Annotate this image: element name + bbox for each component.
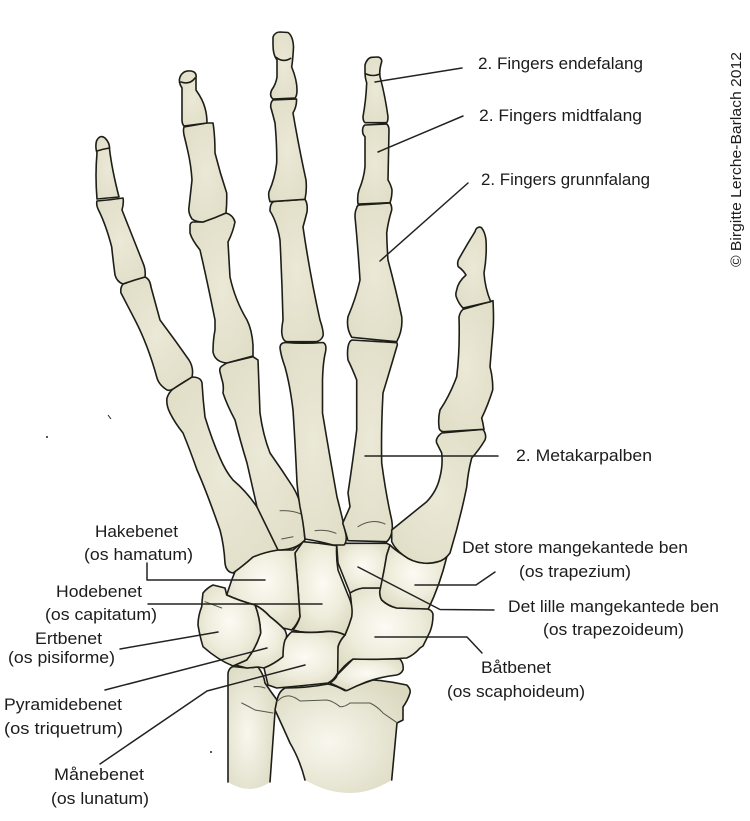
label: triquetrum: (os triquetrum) bbox=[4, 719, 123, 738]
label: capitate: (os capitatum) bbox=[45, 605, 157, 624]
label: scaphoid: (os scaphoideum) bbox=[447, 682, 585, 701]
carpal: lunate bbox=[264, 631, 345, 688]
label: lunate: (os lunatum) bbox=[51, 789, 149, 808]
finger: little finger bbox=[96, 137, 278, 573]
label: pisiform: Ertbenet bbox=[35, 629, 102, 648]
label: trapezium bbox=[462, 538, 688, 581]
label: scaphoid bbox=[447, 658, 585, 701]
carpal: pisiform bbox=[198, 585, 261, 666]
label: proximal phalanx: 2. Fingers grunnfalang bbox=[481, 170, 650, 189]
label: lunate bbox=[51, 765, 149, 808]
label: pisiform bbox=[8, 629, 115, 667]
carpal: hamate bbox=[227, 542, 303, 630]
carpal: triquetrum bbox=[235, 605, 287, 668]
finger: thumb bbox=[392, 227, 494, 563]
label: triquetrum bbox=[4, 695, 123, 738]
label: pisiform: (os pisiforme) bbox=[8, 648, 115, 667]
leader lines bbox=[100, 68, 498, 764]
label: triquetrum: Pyramidebenet bbox=[4, 695, 122, 714]
carpal: capitate bbox=[293, 542, 352, 635]
finger: index finger bbox=[343, 57, 402, 542]
finger: ring finger bbox=[179, 71, 305, 550]
copyright: © Birgitte Lerche-Barlach 2012 bbox=[728, 52, 745, 267]
hand skeleton illustration bbox=[96, 32, 493, 793]
label: trapezoid bbox=[508, 597, 719, 639]
carpal: trapezoid bbox=[337, 543, 390, 593]
label: trapezium: (os trapezium) bbox=[519, 562, 631, 581]
label: trapezoid: (os trapezoideum) bbox=[543, 620, 684, 639]
carpal: trapezium bbox=[380, 545, 447, 609]
label: middle phalanx: 2. Fingers midtfalang bbox=[479, 106, 642, 125]
stray marks bbox=[46, 415, 212, 753]
label: metacarpal: 2. Metakarpalben bbox=[516, 446, 652, 465]
label: trapezium: Det store mangekantede ben bbox=[462, 538, 688, 557]
label: capitate: Hodebenet bbox=[56, 582, 142, 601]
label: capitate bbox=[45, 582, 157, 624]
label: hamate: (os hamatum) bbox=[84, 545, 193, 564]
forearm: radius bbox=[275, 680, 410, 793]
finger: middle finger bbox=[269, 32, 346, 545]
label: lunate: Månebenet bbox=[54, 765, 144, 784]
carpal: scaphoid lower strip bbox=[330, 659, 403, 691]
label: hamate: Hakebenet bbox=[95, 522, 178, 541]
carpal: scaphoid bbox=[337, 588, 433, 675]
forearm: ulna bbox=[228, 666, 277, 789]
label: scaphoid: Båtbenet bbox=[481, 658, 551, 677]
label: hamate bbox=[84, 522, 193, 564]
label: trapezoid: Det lille mangekantede ben bbox=[508, 597, 719, 616]
label: distal phalanx: 2. Fingers endefalang bbox=[478, 54, 643, 73]
